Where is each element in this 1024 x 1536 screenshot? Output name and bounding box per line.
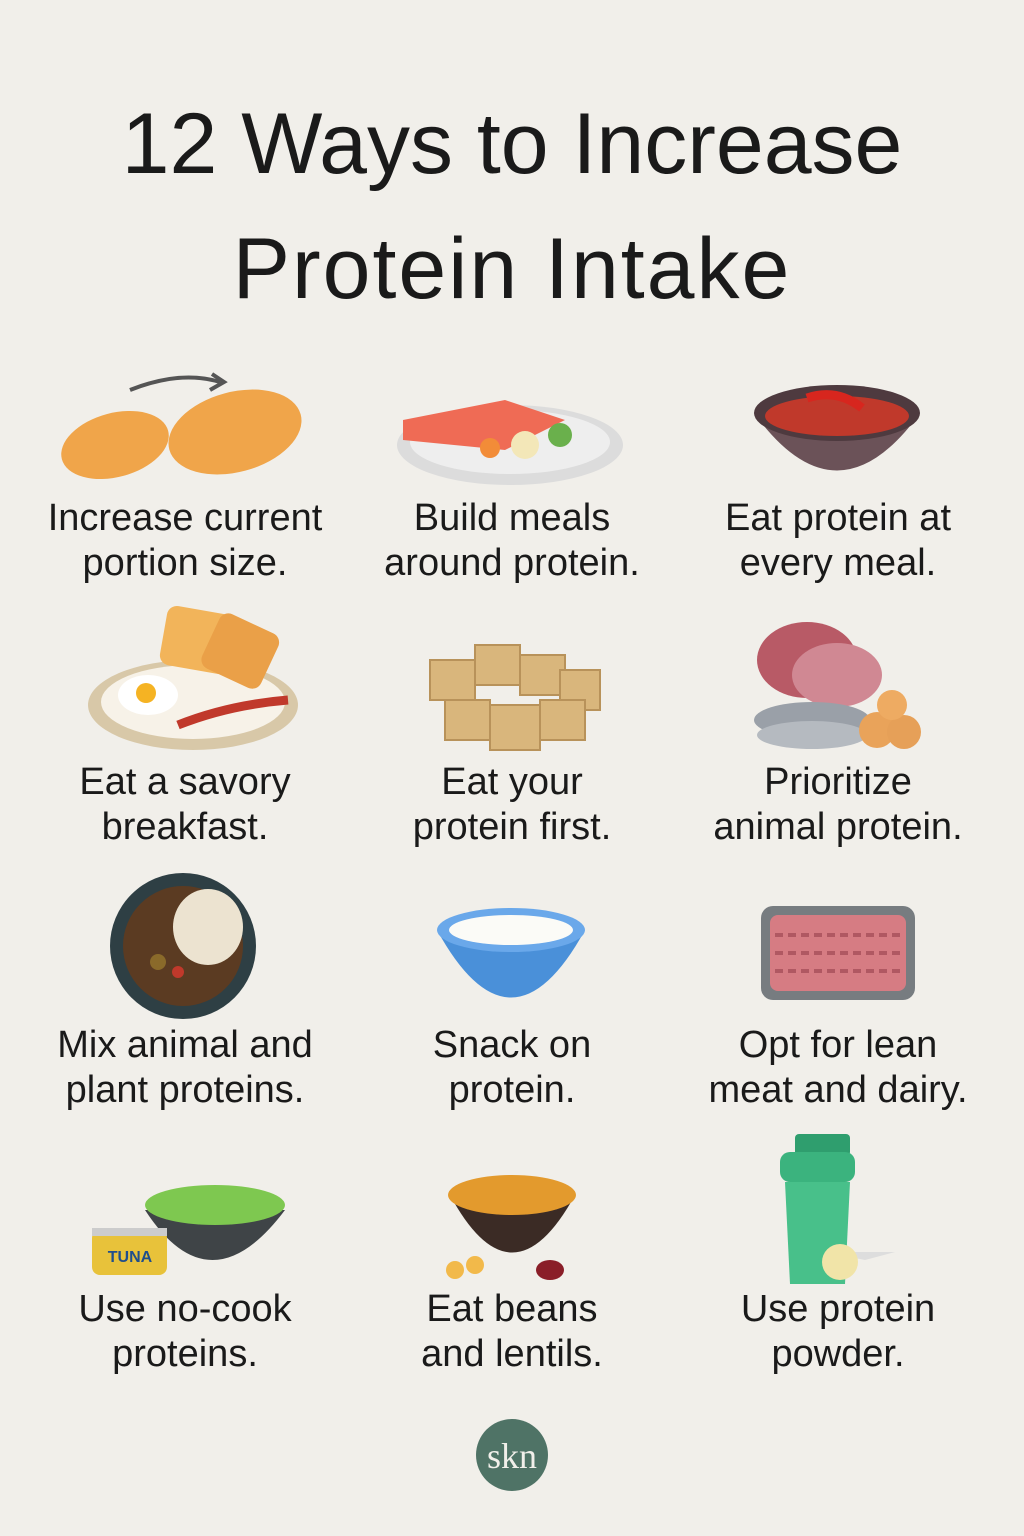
caption 1 (48, 497, 322, 584)
title: Protein Intake (233, 221, 791, 317)
icon: chicken portions (61, 372, 302, 479)
caption 8: protein. (449, 1069, 575, 1111)
caption 7 (57, 1024, 313, 1111)
caption 6: Prioritize (764, 761, 912, 803)
caption 3 (725, 497, 951, 584)
caption 10: proteins. (112, 1333, 258, 1375)
caption 11: and lentils. (421, 1333, 603, 1375)
icon: chili bowl (754, 385, 920, 470)
caption 8: Snack on (433, 1024, 591, 1066)
logo (476, 1419, 548, 1491)
caption 5: Eat your (441, 761, 583, 803)
icon: protein shaker (780, 1134, 894, 1284)
caption 2: Build meals (414, 497, 610, 539)
caption 9 (708, 1024, 968, 1111)
caption 9: meat and dairy. (708, 1069, 968, 1111)
caption 10 (78, 1288, 292, 1375)
icon: meat, fish, eggs (754, 622, 921, 749)
icon: salmon plate (397, 400, 623, 485)
icon: beans and lentils (446, 1175, 576, 1280)
caption 1: portion size. (83, 542, 287, 584)
caption 11: Eat beans (426, 1288, 598, 1330)
icon: tofu (429, 644, 601, 751)
caption 12 (741, 1288, 935, 1375)
icon: tuna and edamame: TUNA (108, 1249, 153, 1266)
caption 11 (421, 1288, 603, 1375)
icon: breakfast (88, 606, 298, 750)
icon: rice and stew bowl (110, 873, 256, 1019)
icon: tuna and edamame (92, 1185, 285, 1275)
caption 5 (413, 761, 611, 848)
caption 12: powder. (771, 1333, 905, 1375)
logo: skn (487, 1436, 537, 1476)
title (122, 96, 902, 317)
caption 3: Eat protein at (725, 497, 951, 539)
caption 12: Use protein (741, 1288, 935, 1330)
caption 10: Use no-cook (78, 1288, 292, 1330)
caption 1: Increase current (48, 497, 322, 539)
caption 6: animal protein. (713, 806, 963, 848)
icon: cottage cheese bowl (437, 908, 585, 998)
caption 9: Opt for lean (739, 1024, 937, 1066)
caption 4: breakfast. (102, 806, 268, 848)
title: 12 Ways to Increase (122, 96, 902, 192)
icon: ground meat tray (761, 906, 915, 1000)
caption 2 (384, 497, 640, 584)
caption 6 (713, 761, 963, 848)
caption 2: around protein. (384, 542, 640, 584)
caption 8 (433, 1024, 591, 1111)
caption 7: Mix animal and (57, 1024, 313, 1066)
caption 4: Eat a savory (79, 761, 291, 803)
caption 5: protein first. (413, 806, 611, 848)
caption 3: every meal. (740, 542, 936, 584)
caption 7: plant proteins. (66, 1069, 304, 1111)
caption 4 (79, 761, 291, 848)
